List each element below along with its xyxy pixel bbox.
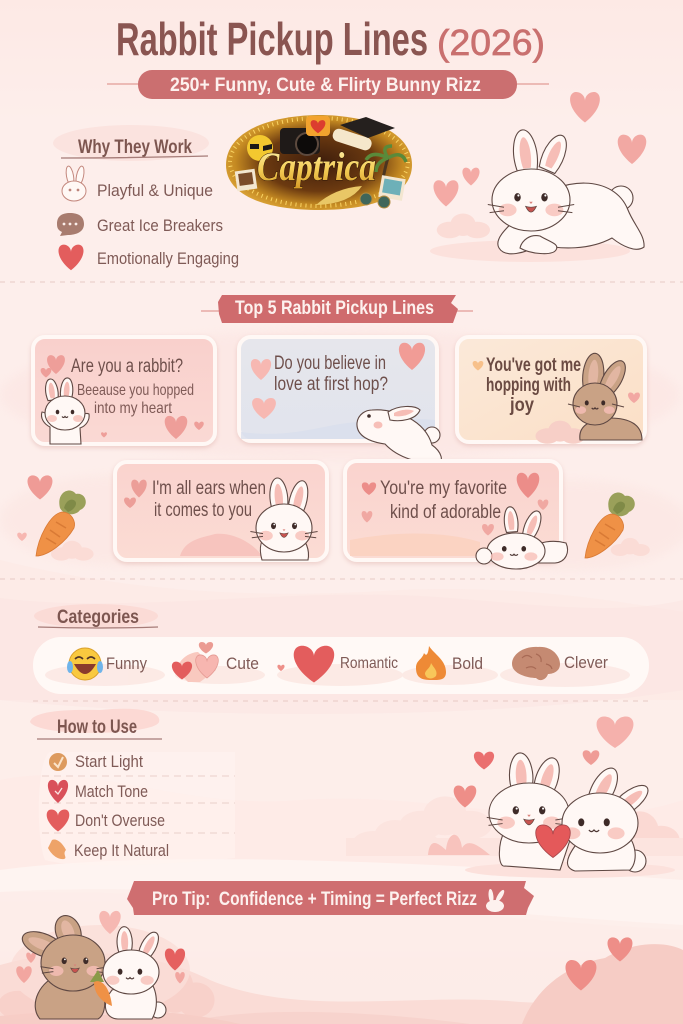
category: bold	[416, 646, 483, 680]
held heart	[536, 825, 570, 858]
category: funny	[67, 648, 147, 680]
ground shadow	[465, 862, 675, 878]
text: ice breakers: Great Ice Breakers	[97, 216, 223, 235]
card 3: hopping with joy	[457, 337, 645, 444]
item: match tone	[48, 780, 148, 803]
category: clever	[512, 647, 608, 680]
feather	[316, 186, 362, 205]
item: match tone: Match Tone	[75, 782, 148, 801]
category: clever: Clever	[564, 653, 608, 672]
bunny	[41, 378, 89, 444]
text	[274, 353, 388, 395]
text: emotionally engaging: Emotionally Engaging	[97, 249, 239, 268]
text: into my heart	[94, 400, 172, 417]
text: hopping with	[486, 375, 571, 396]
divider	[33, 700, 652, 702]
icon: white bunny	[486, 889, 506, 912]
bushes	[346, 796, 683, 856]
panel: categories	[33, 637, 649, 694]
text	[71, 356, 194, 417]
photos	[235, 169, 257, 191]
carrot left	[17, 475, 94, 561]
hearts	[454, 716, 633, 808]
list: how to use	[39, 752, 235, 865]
hearts bottom right	[566, 937, 633, 990]
heading: top 5	[201, 295, 473, 323]
category: bold: Bold	[452, 654, 483, 673]
subtitle banner	[107, 70, 549, 99]
mound	[350, 534, 480, 556]
heading: how to use: How to Use	[57, 717, 137, 738]
text: You're my favorite	[380, 478, 507, 499]
heading: categories	[34, 604, 158, 628]
subtitle banner: 250+ Funny, Cute & Flirty Bunny Rizz	[170, 75, 481, 96]
illustration: running bunny with hearts	[430, 92, 646, 262]
hearts	[124, 480, 147, 508]
hearts	[41, 355, 204, 439]
text: Beeause you hopped	[77, 382, 194, 399]
camera	[280, 128, 320, 155]
pro tip banner	[127, 881, 534, 915]
background: soft washes	[0, 330, 683, 1024]
text	[486, 355, 581, 416]
item: start light: Start Light	[75, 752, 143, 771]
graduation cap	[340, 117, 395, 138]
hearts	[433, 92, 646, 206]
title: (2026)	[437, 22, 545, 63]
bunny lying	[476, 506, 568, 569]
chat heart	[306, 116, 330, 136]
text	[152, 478, 266, 521]
heading: categories: Categories	[57, 607, 139, 628]
divider	[0, 281, 683, 283]
heading: how to use	[30, 709, 162, 739]
pro tip banner: Pro Tip: Confidence + Timing = Perfect Rizz	[152, 889, 477, 910]
illustration: bunnies with carrot	[0, 911, 215, 1019]
item: keep it natural: Keep It Natural	[74, 841, 169, 860]
text: Are you a rabbit?	[71, 356, 183, 377]
bunny hopping	[357, 406, 441, 463]
text	[380, 478, 507, 523]
text: kind of adorable	[390, 502, 501, 523]
mound	[536, 421, 585, 444]
bunny	[250, 477, 318, 560]
card 5: favorite kind of adorable	[345, 461, 568, 569]
scroll	[331, 127, 373, 152]
hearts	[251, 343, 425, 419]
category: funny: Funny	[106, 654, 147, 673]
hearts	[16, 911, 185, 984]
logo: captrica	[226, 115, 412, 210]
heading: why they work	[53, 125, 209, 161]
wordmark: Captrica	[257, 144, 376, 189]
text: Do you believe in	[274, 353, 386, 374]
shadow and cloud	[430, 214, 630, 262]
heading: why they work: Why They Work	[78, 137, 192, 158]
text: it comes to you	[154, 500, 252, 521]
item: keep it natural	[48, 839, 169, 860]
category: romantic: Romantic	[340, 655, 398, 672]
hearts	[362, 473, 548, 536]
sunglasses emoji	[247, 135, 273, 161]
illustration: couple of bunnies with heart	[346, 716, 683, 878]
icon: heart	[58, 245, 84, 270]
text: love at first hop?	[274, 374, 388, 395]
text: joy	[509, 395, 534, 416]
mound	[180, 534, 262, 556]
text: I'm all ears when	[152, 478, 266, 499]
sunglasses	[360, 193, 390, 208]
icon: speech bubble	[57, 213, 84, 236]
heading: top 5: Top 5 Rabbit Pickup Lines	[235, 298, 434, 319]
card 2: love at first hop	[239, 337, 441, 463]
item: don't overuse: Don't Overuse	[75, 811, 165, 830]
item: start light	[49, 752, 143, 771]
icon: bunny outline	[62, 165, 86, 201]
right bunny	[562, 764, 653, 872]
brown bunny	[19, 912, 110, 1019]
carrot	[90, 970, 112, 1006]
brown bunny	[568, 352, 642, 440]
heart	[473, 361, 483, 370]
divider	[0, 578, 683, 580]
category: cute	[172, 642, 259, 682]
category: cute: Cute	[226, 654, 259, 673]
category: romantic	[277, 646, 398, 682]
text: playful: Playful & Unique	[97, 181, 213, 200]
bush	[0, 925, 215, 1019]
carrot right	[585, 492, 650, 558]
bunny body	[488, 128, 644, 254]
item backgrounds	[45, 663, 630, 687]
card 4: all ears	[115, 462, 327, 560]
card 1: are you a rabbit	[33, 337, 215, 444]
item: don't overuse	[47, 809, 165, 832]
left bunny	[487, 752, 571, 870]
text: You've got me	[486, 355, 581, 376]
white bunny	[103, 926, 166, 1019]
list: why they work	[57, 165, 239, 270]
palm	[366, 146, 406, 192]
flower bush	[428, 835, 490, 855]
title: Rabbit Pickup Lines	[116, 13, 428, 65]
